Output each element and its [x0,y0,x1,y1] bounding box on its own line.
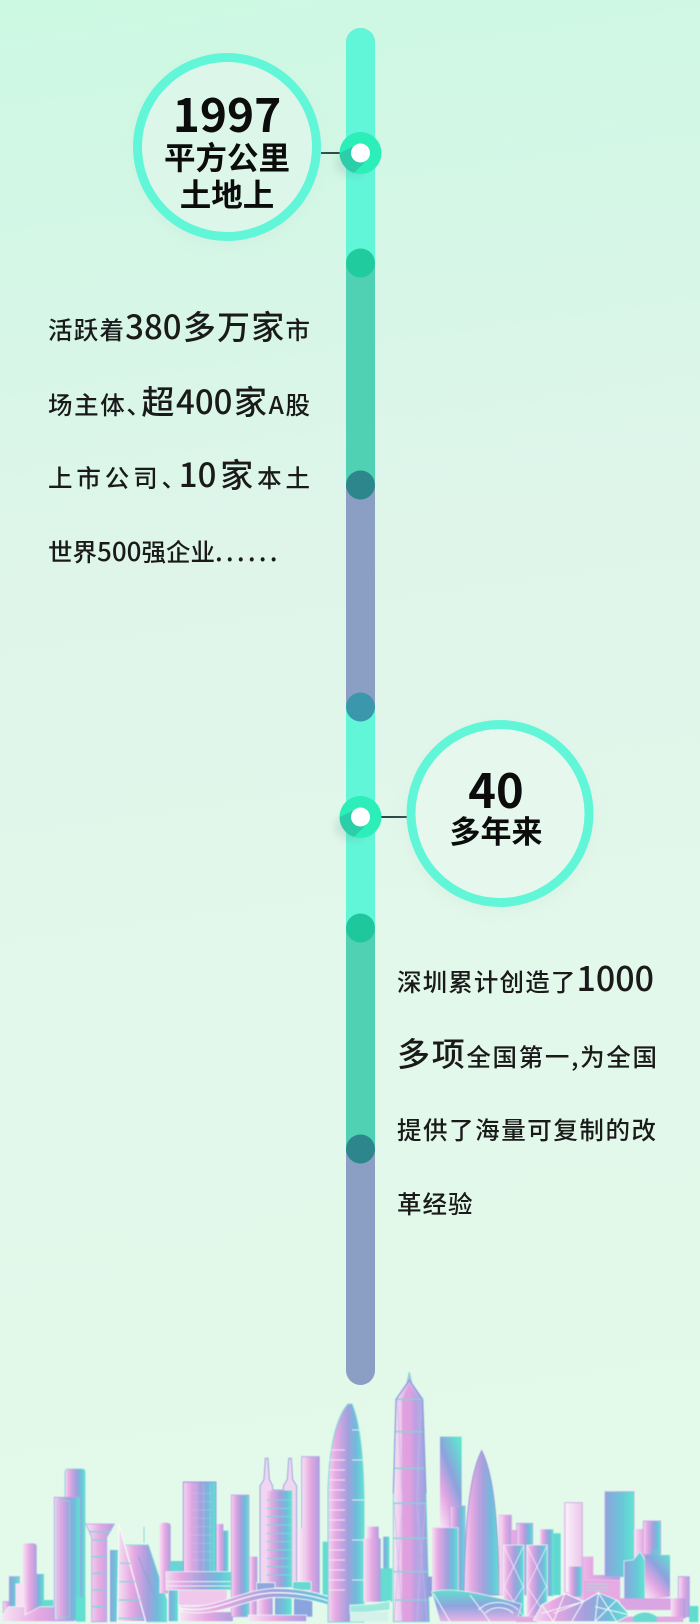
line 多年来: 多年来 [450,807,542,852]
lattice towers and stepped blocks [499,1515,561,1617]
text block: market entities: 场主体、超400家A股 [48,376,310,424]
mid towers [231,1457,328,1617]
funnel and wedge towers [86,1524,167,1622]
text block: national firsts: 革经验 [397,1186,474,1221]
timeline spine and markers [133,28,594,1385]
unit line 平方公里: 平方公里 [164,133,290,179]
text block: national firsts [397,952,657,1221]
number 1997: 1997 [173,80,281,146]
number 40: 40 [468,753,524,822]
bullet tower [464,1451,499,1595]
text block: national firsts: 提供了海量可复制的改 [397,1112,656,1147]
theatre roof [432,1590,522,1622]
oval super-tall tower [328,1404,364,1622]
right skyline buildings [350,1372,698,1622]
grid tower and podium [159,1482,233,1622]
circle badge 1997 [137,58,317,242]
badge text 1997 [164,80,290,216]
text block: national firsts: 深圳累计创造了1000 [397,952,654,1001]
text block: national firsts: 多项全国第一,为全国 [397,1028,657,1076]
diagonal gradient slab and cluster [427,1437,465,1597]
text block: market entities: 活跃着380多万家市 [48,301,310,349]
pagoda super-tall tower [393,1372,429,1622]
left skyline buildings [2,1457,350,1622]
timeline nodes [346,248,375,1164]
connector line 1997 [321,152,346,154]
low-rise left cluster [2,1543,75,1622]
marker dot 1997 [334,132,382,177]
text block: market entities: 上市公司、10家本土 [48,449,310,497]
marker dot 40 [334,796,382,841]
right side stepped blocks [563,1492,698,1622]
text block: market entities [48,301,310,569]
twin spire tower [260,1458,297,1587]
connector line 40 [376,816,407,818]
low blocks beside oval tower [350,1527,392,1622]
crystal pavilion [516,1593,683,1622]
badge text 40 [450,753,542,852]
line 土地上: 土地上 [180,170,274,216]
text block: market entities: 世界500强企业...... [48,532,281,569]
vertical timeline bar [346,28,375,1385]
circle badge 40 [410,724,590,908]
curved bridge [178,1582,350,1622]
tall twin slab towers [54,1469,85,1622]
